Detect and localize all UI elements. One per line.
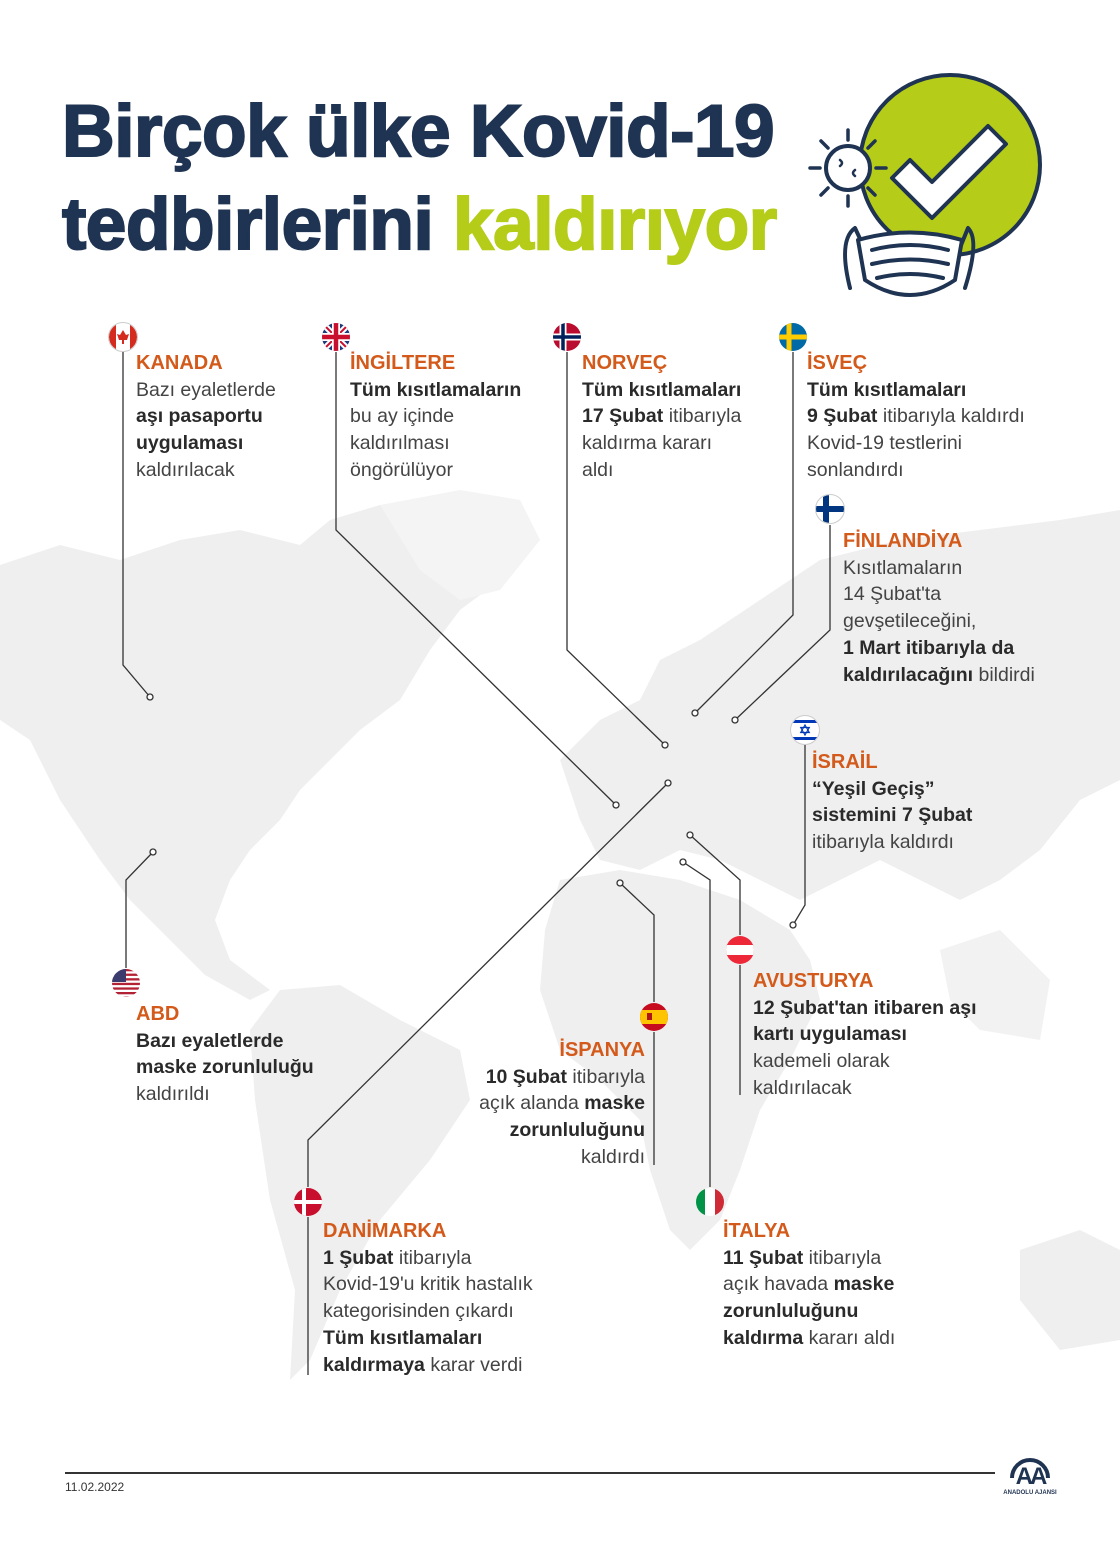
text: İtalya: 11 Şubat itibarıyla [723, 1247, 881, 1269]
text: Finlandiya [843, 530, 1035, 686]
text: İngiltere: Tüm kısıtlamaların [350, 379, 521, 401]
text: İsrail: İSRAİL [812, 751, 878, 773]
connector lines [123, 352, 830, 1375]
text: Norveç: 17 Şubat itibarıyla [582, 405, 741, 427]
text: Norveç: NORVEÇ [582, 352, 667, 374]
flag: Italy [696, 1188, 724, 1216]
text: Kanada: Bazı eyaletlerde [136, 379, 276, 401]
date: 11.02.2022 [65, 1480, 124, 1494]
text: Finlandiya: Kısıtlamaların [843, 557, 962, 579]
text: İtalya: açık havada maske [723, 1273, 894, 1295]
text: İngiltere [350, 352, 521, 481]
text: İspanya: açık alanda maske [479, 1092, 645, 1114]
text: Avusturya: kademeli olarak [753, 1050, 890, 1072]
flag: Denmark [294, 1188, 322, 1216]
text: Finlandiya: 1 Mart itibarıyla da [843, 637, 1014, 659]
text: Danimarka: kategorisinden çıkardı [323, 1300, 514, 1322]
text: Danimarka: 1 Şubat itibarıyla [323, 1247, 471, 1269]
text: Norveç: kaldırma kararı [582, 432, 712, 454]
text: Finlandiya: kaldırılacağını bildirdi [843, 664, 1035, 686]
text: Danimarka [323, 1220, 533, 1376]
AA logo: ANADOLU AJANSI [1003, 1490, 1057, 1496]
title: tedbirlerini kaldırıyor [62, 184, 777, 265]
icon: check mask virus [810, 75, 1040, 295]
text: Danimarka: kaldırmaya karar verdi [323, 1354, 522, 1376]
text: İsveç: İSVEÇ [807, 352, 867, 374]
text: Danimarka: Tüm kısıtlamaları [323, 1327, 482, 1349]
text: İsveç: Tüm kısıtlamaları [807, 379, 966, 401]
flag: Austria [726, 936, 754, 964]
AA logo [1003, 1460, 1057, 1496]
text: İsrail: itibarıyla kaldırdı [812, 831, 954, 853]
title: Birçok ülke Kovid-19 [62, 91, 774, 172]
text: Norveç: aldı [582, 459, 613, 481]
flag: Canada [108, 322, 138, 352]
text: İsveç: sonlandırdı [807, 459, 903, 481]
text: İsrail [812, 750, 972, 853]
text: İsrail: sistemini 7 Şubat [812, 804, 972, 826]
text: Avusturya: kartı uygulaması [753, 1023, 907, 1045]
text: Kanada: aşı pasaportu [136, 405, 263, 427]
text: Finlandiya: 14 Şubat'ta [843, 583, 941, 605]
text: Avusturya [753, 970, 977, 1099]
text: Avusturya: kaldırılacak [753, 1077, 852, 1099]
text: İsveç: 9 Şubat itibarıyla kaldırdı [807, 405, 1025, 427]
flag: Spain [640, 1003, 668, 1031]
text: Finlandiya: FİNLANDİYA [843, 530, 962, 552]
text: İngiltere: öngörülüyor [350, 459, 453, 481]
text: İtalya: kaldırma kararı aldı [723, 1327, 895, 1349]
footer line [65, 1472, 995, 1474]
flag: Norway [553, 323, 581, 351]
text: İspanya [479, 1038, 645, 1168]
text: Danimarka: Kovid-19'u kritik hastalık [323, 1273, 533, 1295]
text: Kanada: kaldırılacak [136, 459, 235, 481]
flag: Finland [815, 494, 845, 524]
text: Danimarka: DANİMARKA [323, 1220, 446, 1242]
text: Kanada: KANADA [136, 352, 223, 374]
text: İsveç: Kovid-19 testlerini [807, 432, 962, 454]
text: İspanya: kaldırdı [581, 1146, 645, 1168]
text: ABD: maske zorunluluğu [136, 1056, 314, 1078]
flag: UK [322, 323, 350, 351]
text: İsveç [807, 352, 1025, 481]
text: Avusturya: AVUSTURYA [753, 970, 873, 992]
flag: USA [112, 969, 140, 997]
text: İsrail: “Yeşil Geçiş” [812, 778, 934, 800]
text: İtalya: zorunluluğunu [723, 1300, 858, 1322]
text: ABD: Bazı eyaletlerde [136, 1030, 283, 1052]
text: İngiltere: İNGİLTERE [350, 352, 455, 374]
text: İspanya: zorunluluğunu [510, 1119, 645, 1141]
text: Avusturya: 12 Şubat'tan itibaren aşı [753, 997, 977, 1019]
text: Finlandiya: gevşetileceğini, [843, 610, 976, 632]
text: İtalya [723, 1220, 895, 1349]
text: İspanya: İSPANYA [559, 1039, 645, 1061]
text: Kanada [136, 352, 276, 481]
flag: Sweden [779, 323, 807, 351]
flag: Israel [790, 715, 820, 745]
AA logo: AA [1016, 1463, 1047, 1490]
text: İngiltere: kaldırılması [350, 432, 450, 454]
text: İspanya: 10 Şubat itibarıyla [486, 1066, 645, 1088]
text: Kanada: uygulaması [136, 432, 243, 454]
text: ABD: kaldırıldı [136, 1083, 210, 1105]
text: ABD: ABD [136, 1003, 179, 1025]
text: Norveç: Tüm kısıtlamaları [582, 379, 741, 401]
text: ABD [136, 1003, 314, 1105]
title [62, 91, 778, 265]
text: İngiltere: bu ay içinde [350, 405, 454, 427]
text: Norveç [582, 352, 742, 481]
text: İtalya: İTALYA [723, 1220, 790, 1242]
